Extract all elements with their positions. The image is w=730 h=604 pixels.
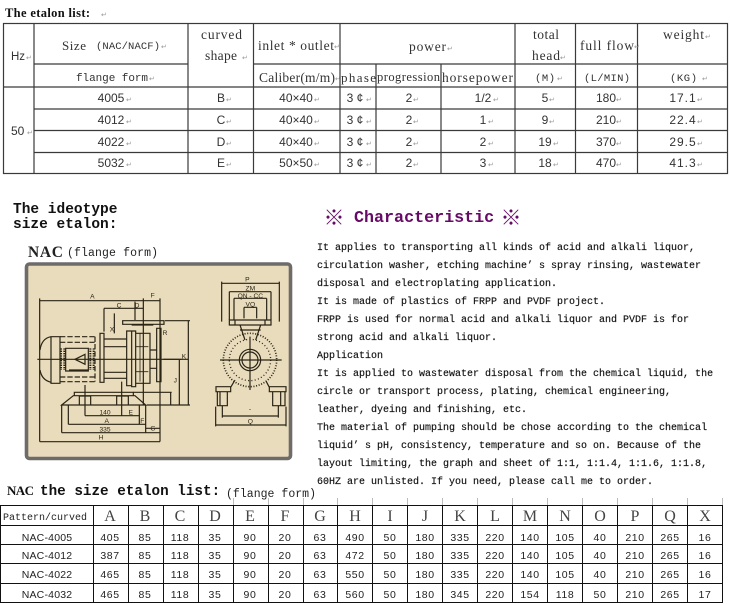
size table row: NAC-4012: 35: [209, 550, 221, 562]
table body: 5032: [98, 156, 125, 170]
size table row: NAC-4032: 50: [384, 589, 396, 601]
return marks: ↵: [413, 140, 419, 148]
table header: (M): [535, 73, 555, 85]
return marks: ↵: [549, 118, 555, 126]
table header: Hz: [11, 51, 25, 63]
size table row: NAC-4005: 210: [625, 532, 645, 544]
size table header: Q: [664, 508, 676, 525]
table header: horsepower: [442, 70, 514, 85]
text block: characteristic description: circulation washer, etching machine’ s spray rinsing, wastewater: [317, 260, 701, 272]
table header: shape: [205, 48, 237, 63]
size table row: NAC-4012: 90: [244, 550, 256, 562]
text block: characteristic description: It applies to transporting all kinds of acid and alkali liquor,: [317, 242, 695, 254]
return marks: ↵: [126, 118, 132, 126]
return marks: ↵: [413, 161, 419, 169]
table body: [11, 91, 697, 170]
size table row: NAC-4012: 472: [345, 550, 365, 562]
size table row: NAC-4012: 16: [699, 550, 711, 562]
size table grid: [0, 498, 722, 602]
drawing: pump side view: 335: [99, 426, 111, 433]
table header: [11, 27, 704, 85]
drawing: pump side view: E: [128, 409, 133, 416]
size table row: NAC-4032: 35: [209, 589, 221, 601]
size table header: F: [281, 508, 290, 525]
return marks: ↵: [314, 96, 320, 104]
return marks: ↵: [366, 118, 372, 126]
return marks: ↵: [413, 96, 419, 104]
text block: characteristic description: FRPP is used for normal acid and alkali liquor and PVDF is for: [317, 314, 689, 326]
table header: (NAC/NACF): [96, 41, 160, 53]
size table row: NAC-4012: 265: [660, 550, 680, 562]
size table header: C: [175, 508, 185, 525]
size table row: NAC-4022: [22, 569, 711, 581]
table body: 2: [406, 156, 413, 170]
drawing: pump side view: A: [90, 293, 95, 300]
return marks: [26, 33, 711, 169]
label: NAC flange form: [28, 244, 158, 261]
return marks: ↵: [553, 161, 559, 169]
size table row: NAC-4032: 85: [139, 589, 151, 601]
table header: Caliber(m/m): [259, 70, 335, 85]
label: NAC flange form: (flange form): [67, 247, 158, 260]
drawing: pump side view: J: [174, 378, 177, 385]
table body: 3 ¢: [347, 91, 363, 105]
return marks: ↵: [705, 33, 711, 41]
heading: NAC the size etalon list: [7, 483, 316, 501]
heading: characteristic: [324, 202, 522, 232]
return marks: ↵: [488, 118, 494, 126]
table body: 4022: [98, 135, 125, 149]
size table row: NAC-4022: 90: [244, 569, 256, 581]
return marks: ↵: [335, 75, 341, 83]
size table row: NAC-4032: 210: [625, 589, 645, 601]
size table row: NAC-4032: 560: [345, 589, 365, 601]
table header: inlet * outlet: [258, 38, 334, 53]
text block: characteristic description: strong acid and alkali liquor.: [317, 332, 497, 344]
size table row: NAC-4022: 35: [209, 569, 221, 581]
table header: (L/MIN): [584, 73, 630, 85]
size table row: NAC-4032: 63: [314, 589, 326, 601]
size table header: D: [209, 508, 221, 525]
size table row: NAC-4005: 335: [450, 532, 470, 544]
return marks: ↵: [314, 161, 320, 169]
return marks: ↵: [549, 96, 555, 104]
table body: 19: [538, 135, 552, 149]
size table row: NAC-4022: 140: [520, 569, 540, 581]
size table row: NAC-4005: 35: [209, 532, 221, 544]
return marks: ↵: [314, 118, 320, 126]
drawing: pump front view: ZM: [246, 286, 255, 293]
size table row: NAC-4032: 118: [171, 589, 189, 601]
size table row: NAC-4032: 20: [279, 589, 291, 601]
table body: 2: [406, 135, 413, 149]
table body: C: [217, 113, 226, 127]
size table row: NAC-4005: 90: [244, 532, 256, 544]
panel background: [26, 264, 290, 458]
size table row: NAC-4005: 85: [139, 532, 151, 544]
table header: power: [409, 39, 446, 54]
size table row: NAC-4032: NAC-4032: [22, 589, 72, 601]
table body: 50: [11, 124, 25, 138]
size table row: NAC-4012: 85: [139, 550, 151, 562]
return marks: ↵: [553, 140, 559, 148]
size table row: NAC-4022: 180: [415, 569, 435, 581]
size table row: NAC-4032: 90: [244, 589, 256, 601]
size table header: G: [314, 508, 326, 525]
table header: head: [532, 48, 560, 63]
table body: B: [217, 91, 225, 105]
drawing: pump side view: F: [140, 418, 144, 425]
table body: 41.3: [669, 156, 697, 170]
size table row: NAC-4022: 16: [699, 569, 711, 581]
table body: 3 ¢: [347, 113, 363, 127]
size table row: NAC-4005: 405: [100, 532, 120, 544]
table body: 1/2: [475, 91, 492, 105]
return marks: ↵: [413, 118, 419, 126]
size table row: NAC-4005: NAC-4005: [22, 532, 72, 544]
size table row: NAC-4032: 17: [699, 589, 711, 601]
text block: characteristic description: circle or transport process, plating, chemical engineering,: [317, 386, 671, 398]
return marks: ↵: [242, 54, 248, 62]
size table row: NAC-4012: 63: [314, 550, 326, 562]
return marks: ↵: [27, 129, 33, 137]
table body: 3 ¢: [347, 135, 363, 149]
table body: 1: [480, 113, 487, 127]
return marks: ↵: [557, 75, 563, 83]
size table row: NAC-4005: 220: [485, 532, 505, 544]
heading: the ideotype size etalon: [13, 202, 117, 233]
return marks: ↵: [616, 140, 622, 148]
size table row: NAC-4022: 20: [279, 569, 291, 581]
size table row: NAC-4032: [22, 589, 711, 601]
return marks: ↵: [226, 140, 232, 148]
table body: D: [217, 135, 226, 149]
drawing: pump side view: F: [151, 292, 155, 299]
table header: weight: [663, 27, 704, 42]
heading: characteristic: Characteristic: [354, 209, 494, 228]
size table header: B: [140, 508, 150, 525]
size table row: NAC-4022: 335: [450, 569, 470, 581]
size table row: NAC-4012: 220: [485, 550, 505, 562]
size table row: NAC-4005: 50: [384, 532, 396, 544]
return marks: ↵: [366, 140, 372, 148]
drawing: pump side view: X: [110, 327, 115, 334]
text block: characteristic description: Application: [317, 350, 383, 362]
table body: 2: [406, 113, 413, 127]
size table row: NAC-4012: NAC-4012: [22, 550, 72, 562]
text block: characteristic description: layout limiting, the graph and sheet of 1:1, 1:1.4, 1:1.6, 1:1.8,: [317, 458, 707, 470]
size table row: NAC-4005: [22, 532, 711, 544]
drawing: pump front view: [216, 277, 286, 426]
table header: progression: [377, 70, 441, 84]
return marks: ↵: [493, 96, 499, 104]
table header: total: [533, 27, 559, 42]
size table header: K: [454, 508, 466, 525]
drawing: pump side view: G: [150, 426, 156, 433]
size table row: NAC-4022: 220: [485, 569, 505, 581]
size table row: NAC-4005: 118: [171, 532, 189, 544]
size table header: L: [490, 508, 500, 525]
text block: characteristic description: 60HZ are unlisted. If you need, please call me to order.: [317, 476, 653, 488]
size table header: I: [387, 508, 393, 525]
text block: characteristic description: disposal and electroplating application.: [317, 278, 557, 290]
text block: characteristic description: It is made of plastics of FRPP and PVDF project.: [317, 296, 605, 308]
return marks: ↵: [697, 96, 703, 104]
return marks: ↵: [26, 54, 32, 62]
table header: Size: [62, 38, 86, 53]
drawing: pump front view: -: [249, 406, 251, 413]
drawing: pump side view: K: [182, 353, 187, 360]
drawing: pump front view: VQ: [246, 302, 255, 309]
size table row: NAC-4012: [22, 550, 711, 562]
table body: 40×40: [279, 113, 313, 127]
size table row: NAC-4005: 63: [314, 532, 326, 544]
return marks: ↵: [447, 45, 453, 53]
text block: characteristic description: The material of pumping should be chose according to the chemical: [317, 422, 707, 434]
table body: 470: [596, 156, 616, 170]
heading: NAC the size etalon list: (flange form): [226, 488, 316, 501]
size table header: P: [631, 508, 640, 525]
size table row: NAC-4012: 20: [279, 550, 291, 562]
table body: 4012: [98, 113, 125, 127]
size table row: NAC-4022: 50: [384, 569, 396, 581]
table body: 40×40: [279, 91, 313, 105]
size table row: NAC-4022: 465: [100, 569, 120, 581]
table header: phase: [341, 70, 376, 85]
size table header: O: [594, 508, 606, 525]
table body: 29.5: [669, 135, 697, 149]
table body: 180: [596, 91, 616, 105]
size table row: NAC-4012: 105: [555, 550, 575, 562]
table body: 5: [542, 91, 549, 105]
size table row: NAC-4032: 345: [450, 589, 470, 601]
text block: characteristic description: liquid’ s pH, consistency, temperature and so on. Because of the: [317, 440, 701, 452]
drawing: pump side view: A: [104, 418, 109, 425]
table body: 3 ¢: [347, 156, 363, 170]
drawing: pump front view: Q: [248, 419, 253, 426]
size table row: NAC-4022: NAC-4022: [22, 569, 72, 581]
table body: 210: [596, 113, 616, 127]
return marks: ↵: [314, 140, 320, 148]
size table row: NAC-4012: 50: [384, 550, 396, 562]
panel: dimension drawing: [26, 264, 290, 458]
table body: 50×50: [279, 156, 313, 170]
drawing: pump side view: R: [163, 330, 168, 337]
table body: 18: [538, 156, 552, 170]
title: the etalon list: The etalon list:: [5, 6, 90, 20]
heading: characteristic: ※: [324, 202, 344, 232]
return marks: ↵: [366, 96, 372, 104]
return marks: ↵: [149, 75, 155, 83]
drawing: pump front view: P: [245, 277, 250, 284]
size table header: A: [104, 508, 116, 525]
size table row: NAC-4005: 140: [520, 532, 540, 544]
return marks: ↵: [697, 118, 703, 126]
size table row: NAC-4022: 63: [314, 569, 326, 581]
return marks: ↵: [616, 118, 622, 126]
table: NAC size list: [0, 498, 722, 602]
drawing: pump front view: QN - CC: [238, 293, 263, 300]
heading: characteristic: ※: [500, 202, 522, 232]
table body: 17.1: [669, 91, 697, 105]
size table row: NAC-4012: 140: [520, 550, 540, 562]
table body: 2: [480, 135, 487, 149]
text block: characteristic description: It is applied to wastewater disposal from the chemical liquid, the: [317, 368, 713, 380]
size table header: E: [245, 508, 255, 525]
size table row: NAC-4022: 210: [625, 569, 645, 581]
return marks: ↵: [702, 75, 708, 83]
table header: (KG): [670, 73, 697, 85]
size table row: NAC-4032: 220: [485, 589, 505, 601]
table body: E: [217, 156, 225, 170]
return marks: ↵: [126, 96, 132, 104]
drawing: pump side view: C: [117, 302, 122, 309]
size table header: H: [349, 508, 361, 525]
return marks: ↵: [697, 140, 703, 148]
table: pump specification: [4, 24, 728, 174]
return marks: ↵: [366, 161, 372, 169]
size table row: NAC-4022: 265: [660, 569, 680, 581]
size table row: NAC-4005: 180: [415, 532, 435, 544]
return marks: ↵: [126, 161, 132, 169]
size table header: Pattern/curved: [3, 512, 87, 524]
size table row: NAC-4012: 180: [415, 550, 435, 562]
size table row: NAC-4005: 16: [699, 532, 711, 544]
table header: curved: [201, 27, 242, 42]
size table row: NAC-4032: 118: [556, 589, 574, 601]
size table row: NAC-4022: 105: [555, 569, 575, 581]
size table row: NAC-4005: 490: [345, 532, 365, 544]
return marks: ↵: [697, 161, 703, 169]
return marks: ↵: [226, 118, 232, 126]
size table row: NAC-4005: 20: [279, 532, 291, 544]
table body: 40×40: [279, 135, 313, 149]
table header: flange form: [76, 73, 148, 85]
return marks: ↵: [226, 96, 232, 104]
table body: 370: [596, 135, 616, 149]
drawing: pump side view: H: [99, 435, 104, 442]
text block: characteristic description: leather, dyeing and finishing, etc.: [317, 404, 527, 416]
table body: 9: [542, 113, 549, 127]
heading: the ideotype size etalon: The ideotype: [13, 202, 117, 218]
text block: characteristic description: [317, 242, 713, 488]
heading: the ideotype size etalon: size etalon:: [13, 217, 117, 233]
title: the etalon list: ↵: [101, 11, 107, 19]
size table row: NAC-4005: 40: [594, 532, 606, 544]
size table row: NAC-4022: 118: [171, 569, 189, 581]
size table header: J: [422, 508, 428, 525]
return marks: ↵: [488, 140, 494, 148]
size table row: NAC-4012: 40: [594, 550, 606, 562]
table body: 4005: [98, 91, 125, 105]
table grid: [4, 24, 728, 174]
return marks: ↵: [126, 140, 132, 148]
label: NAC flange form: NAC: [28, 244, 63, 261]
size table row: NAC-4005: 105: [555, 532, 575, 544]
table header: full flow: [580, 38, 634, 53]
heading: NAC the size etalon list: NAC: [7, 483, 34, 498]
size table header: [3, 508, 711, 525]
drawing: pump side view: 140: [99, 409, 111, 416]
return marks: ↵: [560, 54, 566, 62]
size table row: NAC-4032: 265: [660, 589, 680, 601]
heading: NAC the size etalon list: the size etalon list:: [40, 484, 220, 500]
size table row: NAC-4022: 85: [139, 569, 151, 581]
table body: 3: [480, 156, 487, 170]
size table header: N: [559, 508, 571, 525]
return marks: ↵: [226, 161, 232, 169]
size table row: NAC-4032: 50: [594, 589, 606, 601]
table body: 2: [406, 91, 413, 105]
size table header: M: [523, 508, 537, 525]
return marks: ↵: [334, 43, 340, 51]
drawing: pump side view: [37, 292, 190, 442]
size table row: NAC-4032: 465: [100, 589, 120, 601]
drawing: pump side view: D: [135, 302, 140, 309]
table body: 22.4: [669, 113, 697, 127]
return marks: ↵: [488, 161, 494, 169]
size table row: NAC-4022: 550: [345, 569, 365, 581]
size table row: NAC-4012: 118: [171, 550, 189, 562]
size table row: NAC-4032: 154: [520, 589, 540, 601]
return marks: ↵: [616, 96, 622, 104]
size table row: NAC-4022: 40: [594, 569, 606, 581]
size table row: NAC-4012: 210: [625, 550, 645, 562]
return marks: ↵: [634, 43, 640, 51]
size table row: NAC-4012: 387: [100, 550, 120, 562]
size table row: NAC-4005: 265: [660, 532, 680, 544]
return marks: ↵: [616, 161, 622, 169]
size table header: X: [699, 508, 711, 525]
return marks: ↵: [161, 43, 167, 51]
size table row: NAC-4032: 180: [415, 589, 435, 601]
size table row: NAC-4012: 335: [450, 550, 470, 562]
